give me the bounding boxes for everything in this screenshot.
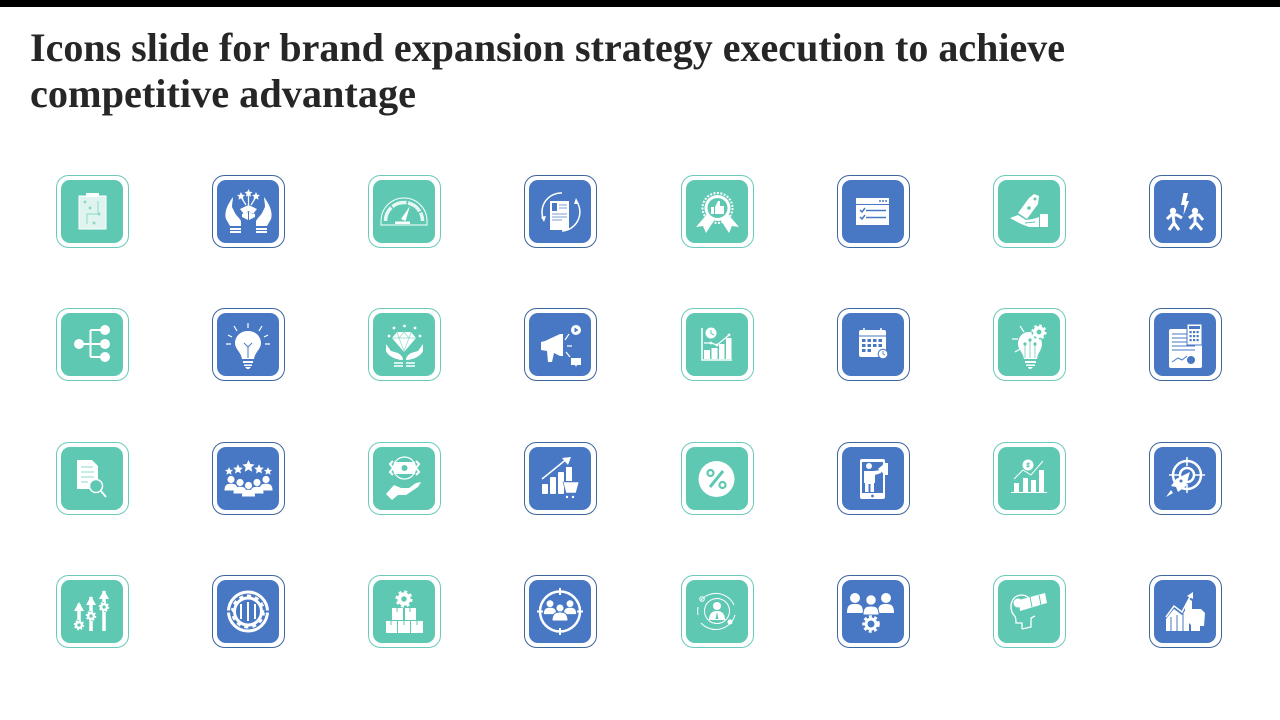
- icon tile: megaphone with play and chat: [524, 308, 596, 380]
- icon tile: person in orbit: [682, 576, 754, 648]
- icon tile: percent badge: [682, 442, 754, 514]
- icon tile: hand holding money in gear: [368, 442, 440, 514]
- icon tile: team with gear: [838, 576, 910, 648]
- icon tile: bulb with gear and circuits: [994, 308, 1066, 380]
- top black bar: [0, 0, 1280, 7]
- title: Icons slide for brand expansion strategy execution to achieve: [30, 25, 1065, 70]
- icon tile: clipboard plan: [56, 176, 128, 248]
- title: competitive advantage: [30, 71, 416, 116]
- icon tile: dollar growth chart: [994, 442, 1066, 514]
- icon tile: award rosette with thumb: [682, 176, 754, 248]
- icon tile: arrows with gears: [56, 576, 128, 648]
- icon tile: rated team with stars: [212, 442, 284, 514]
- icon tile: gear with tools in ring: [212, 576, 284, 648]
- icon tile: rising bars with shopping cart: [524, 442, 596, 514]
- icon tile: target with team: [524, 576, 596, 648]
- icon tile: speedometer: [368, 176, 440, 248]
- title: [30, 25, 1065, 116]
- icon tile: calendar with clock: [838, 308, 910, 380]
- icon tile: chart with fist and arrow: [1150, 576, 1222, 648]
- icon tile: two running people with lightning: [1150, 176, 1222, 248]
- icon tile: head with telescope: [994, 576, 1066, 648]
- icon tile: growth chart with clock: [682, 308, 754, 380]
- icon tile: report with calculator: [1150, 308, 1222, 380]
- icon tile: branching hierarchy: [56, 308, 128, 380]
- icon tile: phone with presenter and megaphone: [838, 442, 910, 514]
- icon tile: hand holding price tag: [994, 176, 1066, 248]
- icon tile: light bulb: [212, 308, 284, 380]
- icon tile: document with magnifier: [56, 442, 128, 514]
- icon tile: rocket hitting target: [1150, 442, 1222, 514]
- icon tile: boxes with gear: [368, 576, 440, 648]
- icon tile: checklist window: [838, 176, 910, 248]
- icon tile: hands with opening box: [212, 176, 284, 248]
- icon tile: document in cycle arrows: [524, 176, 596, 248]
- icon tile: hands with diamond: [368, 308, 440, 380]
